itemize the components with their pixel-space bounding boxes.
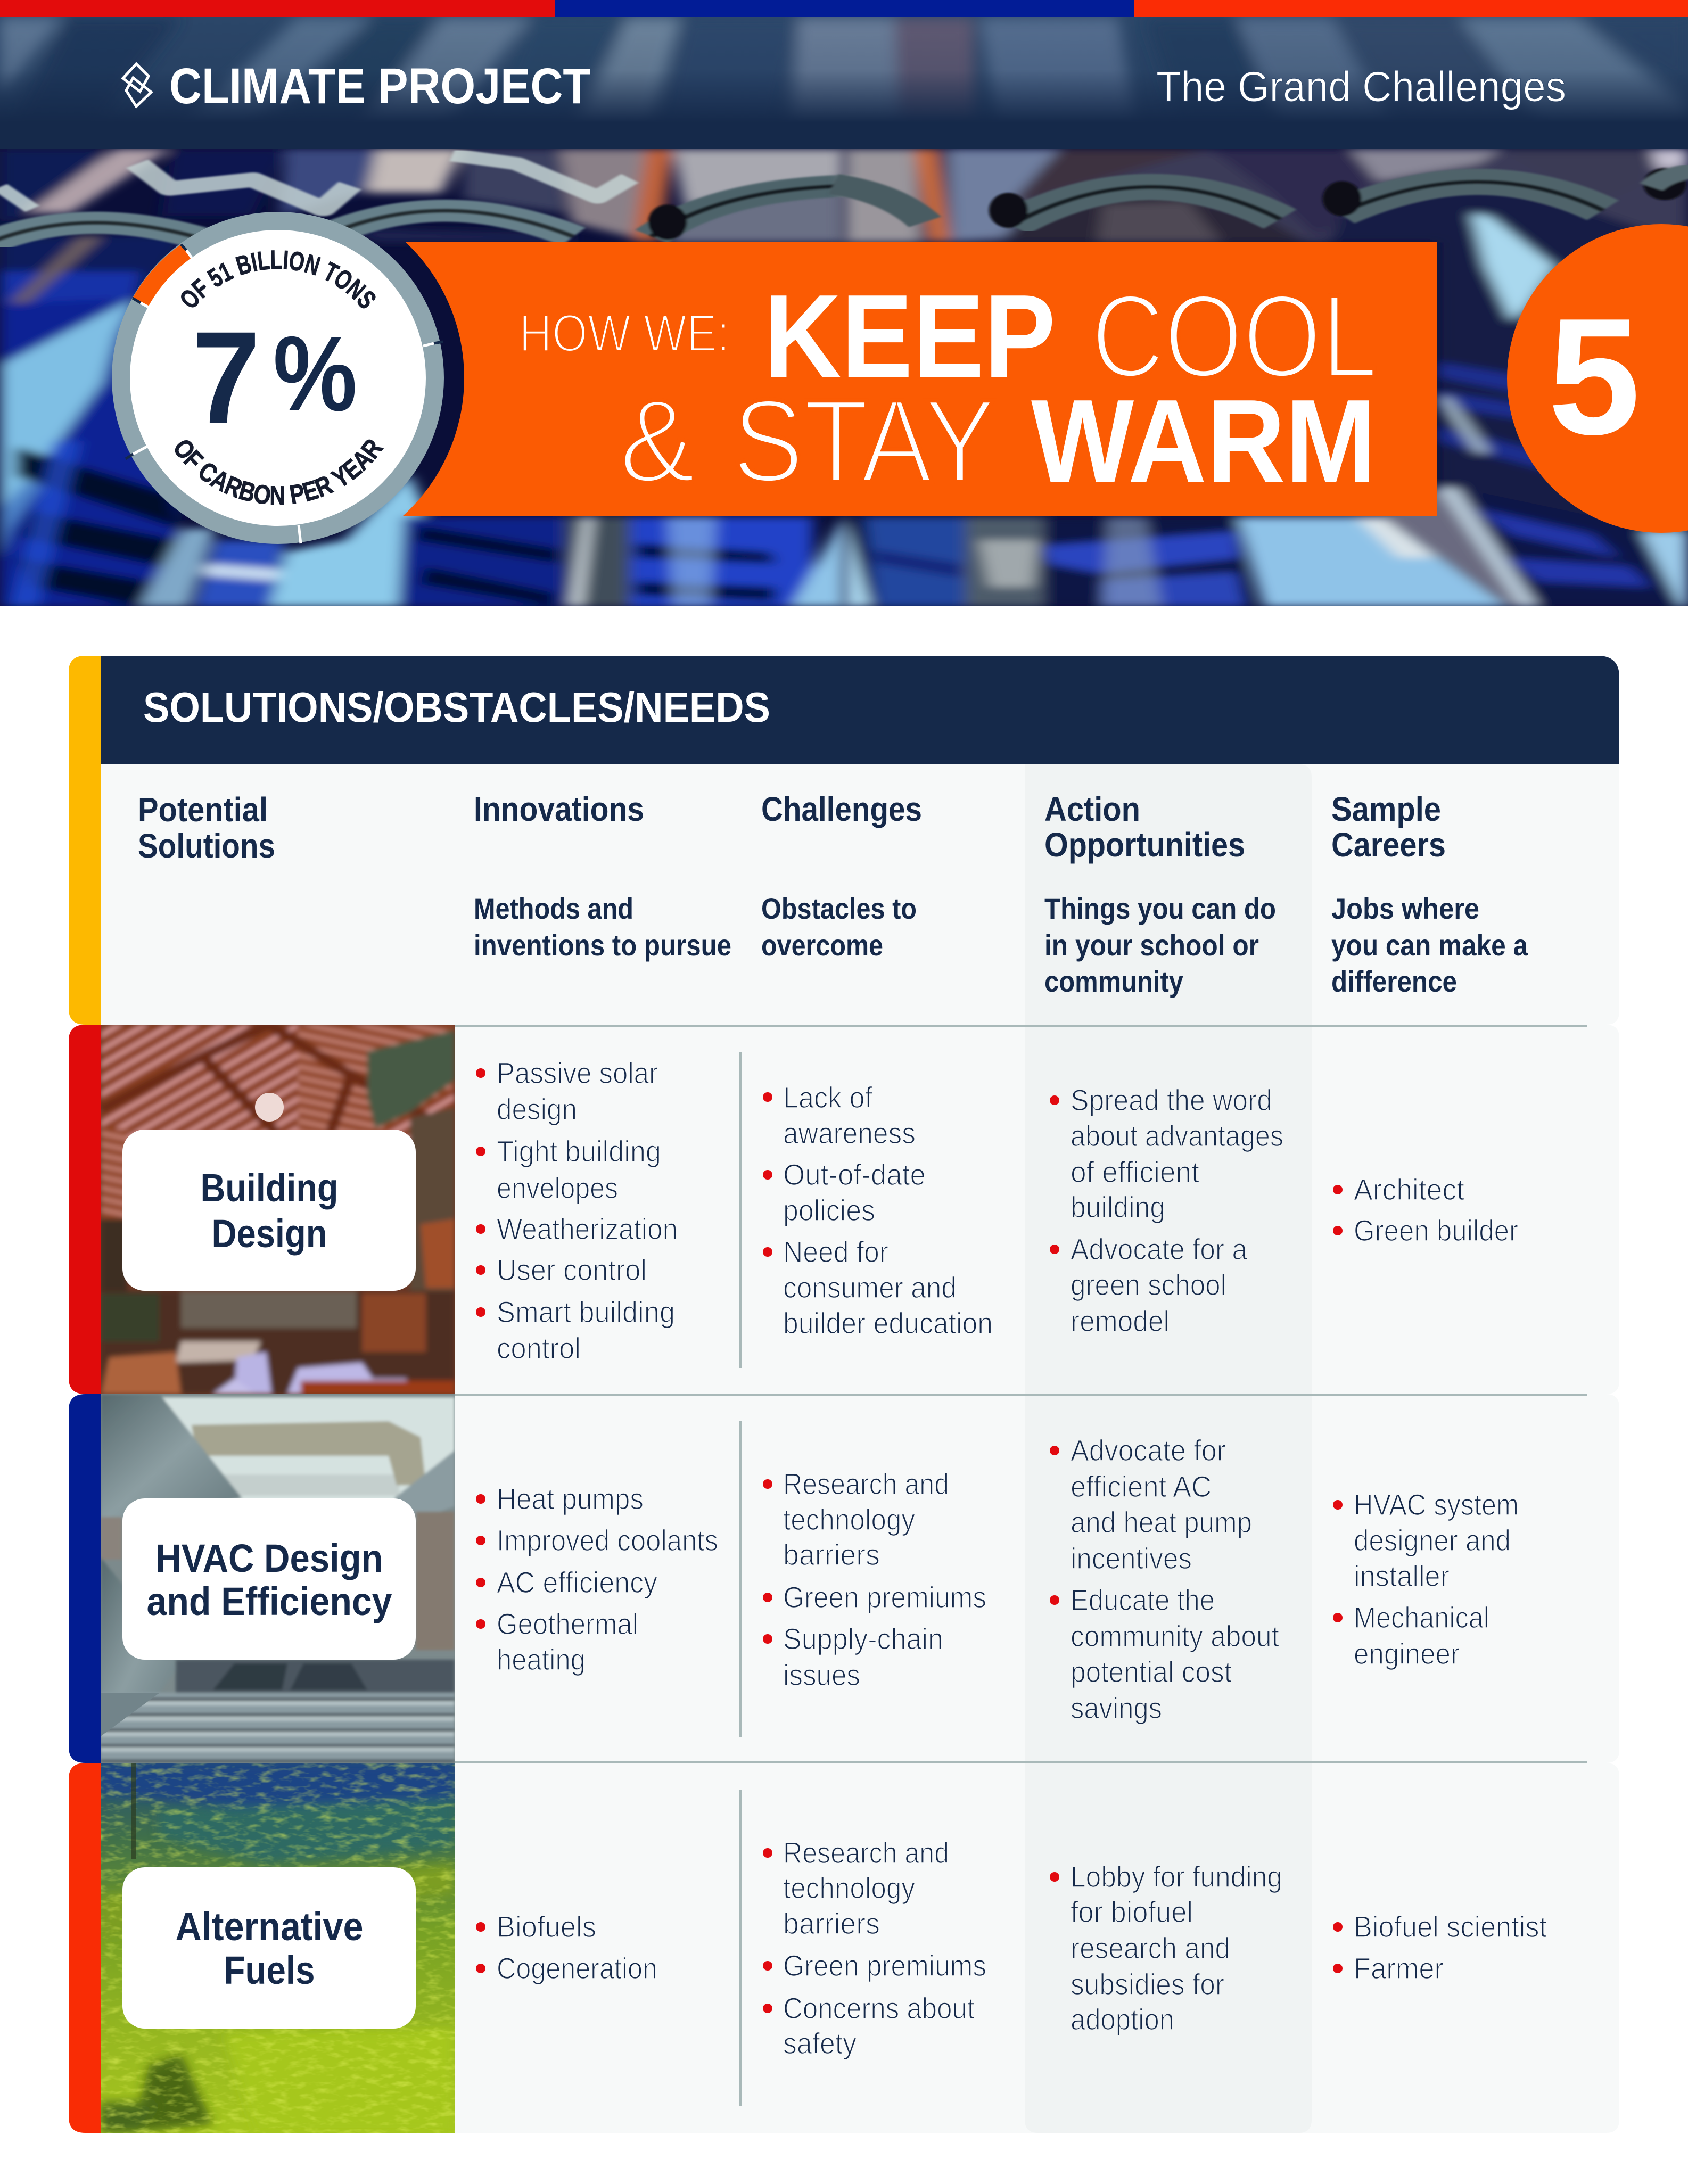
table heading bar <box>101 656 1619 764</box>
list: HVAC challenges <box>763 1467 986 1692</box>
list: HVAC actions: and heat pump <box>1071 1505 1252 1539</box>
list: HVAC careers: Mechanical <box>1354 1601 1489 1634</box>
curved text top: OF 51 BILLION TONS <box>181 250 376 309</box>
list: alternative fuels actions: adoption <box>1071 2002 1174 2036</box>
column heading: Innovations: inventions to pursue <box>474 928 731 962</box>
column heading: Action Opportunities: community <box>1044 965 1183 998</box>
column heading: Action Opportunities: in your school or <box>1044 928 1259 962</box>
list: HVAC challenges: issues <box>783 1658 860 1692</box>
list: HVAC actions: efficient AC <box>1071 1470 1212 1503</box>
label: Building Design: Design <box>212 1211 327 1256</box>
list: HVAC innovations: AC efficiency <box>497 1565 657 1599</box>
hero photo: water tubes <box>0 149 1688 607</box>
list: HVAC innovations: Improved coolants <box>497 1523 718 1557</box>
row 1 photo: building interior <box>101 1025 455 1394</box>
list: alternative fuels careers <box>1333 1910 1547 1985</box>
list: HVAC challenges: barriers <box>783 1538 880 1571</box>
list: building design actions: remodel <box>1071 1304 1170 1338</box>
header band with faded photo <box>0 17 1688 149</box>
title line 1: COOL <box>1091 270 1378 402</box>
list: alternative fuels innovations: Cogeneration <box>497 1951 657 1985</box>
table background <box>101 764 1619 2133</box>
list: building design challenges: consumer and <box>783 1271 957 1304</box>
column heading: Challenges: Obstacles to <box>761 892 917 925</box>
title banner <box>402 242 1437 516</box>
column heading: Sample Careers: Jobs where <box>1331 892 1479 925</box>
list: HVAC challenges: Research and <box>783 1467 949 1501</box>
label: HVAC Design and Efficiency <box>122 1498 416 1660</box>
list: alternative fuels challenges: safety <box>783 2026 857 2060</box>
column heading: Potential Solutions: Potential <box>138 790 268 829</box>
big number: 7 <box>192 304 260 451</box>
icon: Climate Project logo <box>123 64 151 106</box>
column heading: Sample Careers: difference <box>1331 965 1457 998</box>
list: alternative fuels innovations <box>476 1910 657 1985</box>
curved text bottom: OF CARBON PER YEAR <box>175 440 384 505</box>
list: HVAC innovations: heating <box>497 1643 586 1676</box>
column heading: Innovations <box>474 790 731 962</box>
list: building design careers <box>1333 1173 1518 1247</box>
column heading: Challenges: overcome <box>761 928 883 962</box>
column heading: Action Opportunities: Opportunities <box>1044 826 1245 864</box>
list: HVAC careers <box>1333 1488 1519 1670</box>
label: Alternative Fuels <box>122 1867 416 2029</box>
list: building design challenges <box>763 1081 993 1340</box>
chapter number badge <box>1507 224 1688 533</box>
list: alternative fuels actions: research and <box>1071 1931 1230 1965</box>
arches right <box>834 168 1688 228</box>
row 3 photo: algae on water <box>101 1763 455 2133</box>
list: building design innovations: control <box>497 1331 581 1365</box>
list: building design innovations: Smart building <box>497 1295 675 1329</box>
column heading: Action Opportunities: Things you can do <box>1044 892 1276 925</box>
list: alternative fuels actions: subsidies for <box>1071 1967 1224 2001</box>
series title: The Grand Challenges <box>1156 63 1566 110</box>
hero photo left half <box>0 149 844 607</box>
list: building design careers: Green builder <box>1354 1214 1518 1247</box>
list: HVAC challenges: Green premiums <box>783 1580 986 1614</box>
column heading: Sample Careers: you can make a <box>1331 928 1528 962</box>
chapter number badge: 5 <box>1548 284 1641 469</box>
label: HVAC Design and Efficiency: and Efficiency <box>147 1579 392 1623</box>
list: HVAC actions: Advocate for <box>1071 1433 1226 1467</box>
list: alternative fuels challenges: Green premiums <box>783 1949 986 1982</box>
list: building design challenges: Lack of <box>783 1081 872 1114</box>
list: HVAC careers: designer and <box>1354 1523 1511 1557</box>
label: Alternative Fuels: Alternative <box>176 1905 363 1949</box>
list: alternative fuels careers: Biofuel scientist <box>1354 1910 1547 1943</box>
list: building design challenges: awareness <box>783 1116 916 1150</box>
list: alternative fuels actions <box>1050 1860 1282 2036</box>
column heading: Potential Solutions <box>138 790 275 865</box>
list: building design challenges: Out-of-date <box>783 1158 926 1191</box>
list: building design challenges: Need for <box>783 1235 888 1268</box>
logo wordmark: CLIMATE PROJECT <box>169 58 590 114</box>
title line 2: & <box>619 375 696 507</box>
label: Building Design <box>122 1130 416 1291</box>
list: building design innovations: Tight building <box>497 1134 661 1168</box>
list: HVAC careers: installer <box>1354 1559 1450 1593</box>
title line 2 <box>619 375 1376 507</box>
title line 2: WARM <box>1031 375 1376 507</box>
panel: solutions table <box>69 656 1619 2133</box>
column heading: Challenges <box>761 790 922 962</box>
list: HVAC actions: potential cost <box>1071 1655 1232 1688</box>
list: building design actions: green school <box>1071 1268 1226 1301</box>
list: building design careers: Architect <box>1354 1173 1464 1206</box>
column heading: Challenges: Challenges <box>761 790 922 828</box>
column heading: Sample Careers <box>1331 790 1528 998</box>
top colour stripe <box>0 0 1688 17</box>
list: building design innovations: User control <box>497 1253 647 1287</box>
list: building design actions: of efficient <box>1071 1155 1199 1189</box>
list: alternative fuels actions: for biofuel <box>1071 1895 1193 1928</box>
label: Alternative Fuels: Fuels <box>224 1948 315 1992</box>
list: building design actions <box>1050 1083 1283 1338</box>
column heading: Innovations: Methods and <box>474 892 633 925</box>
list: alternative fuels careers: Farmer <box>1354 1951 1444 1985</box>
list: alternative fuels challenges: technology <box>783 1871 915 1905</box>
hero photo right half <box>844 149 1688 607</box>
big number <box>192 304 357 451</box>
list: HVAC challenges: technology <box>783 1503 915 1536</box>
title line 2: STAY <box>732 375 995 507</box>
list: HVAC actions: community about <box>1071 1619 1279 1653</box>
list: HVAC innovations: Heat pumps <box>497 1482 644 1515</box>
stat badge: 7% of carbon <box>112 212 444 544</box>
list: HVAC careers: engineer <box>1354 1637 1460 1670</box>
list: building design actions: Advocate for a <box>1071 1232 1248 1266</box>
list: building design actions: building <box>1071 1190 1165 1224</box>
list: alternative fuels challenges: Research and <box>783 1836 949 1869</box>
frames and arches left <box>0 155 861 243</box>
list: HVAC actions: savings <box>1071 1691 1162 1725</box>
title line 1 <box>519 270 1378 402</box>
list: alternative fuels challenges <box>763 1836 986 2060</box>
column heading: Action Opportunities: Action <box>1044 790 1140 828</box>
list: building design actions: about advantages <box>1071 1119 1283 1152</box>
column heading: Sample Careers: Careers <box>1331 826 1446 864</box>
list: building design innovations: Passive solar <box>497 1056 658 1090</box>
column heading: Action Opportunities <box>1044 790 1276 998</box>
label: Building Design: Building <box>200 1166 339 1210</box>
list: HVAC actions: Educate the <box>1071 1583 1215 1617</box>
list: building design actions: Spread the word <box>1071 1083 1272 1117</box>
list: HVAC actions: incentives <box>1071 1542 1192 1575</box>
list: HVAC careers: HVAC system <box>1354 1488 1519 1521</box>
list: alternative fuels challenges: Concerns about <box>783 1991 975 2025</box>
column heading: Innovations: Innovations <box>474 790 644 828</box>
column heading: Sample Careers: Sample <box>1331 790 1441 828</box>
left colour tabs <box>69 656 101 2133</box>
list: building design innovations: design <box>497 1092 577 1126</box>
column heading: Potential Solutions: Solutions <box>138 827 275 865</box>
table heading bar: SOLUTIONS/OBSTACLES/NEEDS <box>143 683 770 731</box>
list: HVAC challenges: Supply-chain <box>783 1622 943 1655</box>
list: HVAC innovations: Geothermal <box>497 1607 638 1641</box>
label: HVAC Design and Efficiency: HVAC Design <box>155 1536 383 1580</box>
list: building design innovations: Weatherization <box>497 1212 678 1246</box>
list: HVAC innovations <box>476 1482 718 1676</box>
row 2 photo: HVAC ducts <box>101 1394 455 1763</box>
list: building design challenges: builder education <box>783 1306 993 1340</box>
orange ring segment <box>133 244 192 307</box>
list: alternative fuels actions: Lobby for funding <box>1071 1860 1282 1893</box>
big number: % <box>273 315 357 433</box>
title line 1: HOW WE: <box>519 303 730 362</box>
title line 1: KEEP <box>764 270 1056 402</box>
list: building design innovations <box>476 1056 678 1365</box>
list: HVAC actions <box>1050 1433 1279 1725</box>
list: building design innovations: envelopes <box>497 1171 618 1205</box>
list: alternative fuels challenges: barriers <box>783 1907 880 1940</box>
list: building design challenges: policies <box>783 1193 875 1227</box>
list: alternative fuels innovations: Biofuels <box>497 1910 596 1943</box>
